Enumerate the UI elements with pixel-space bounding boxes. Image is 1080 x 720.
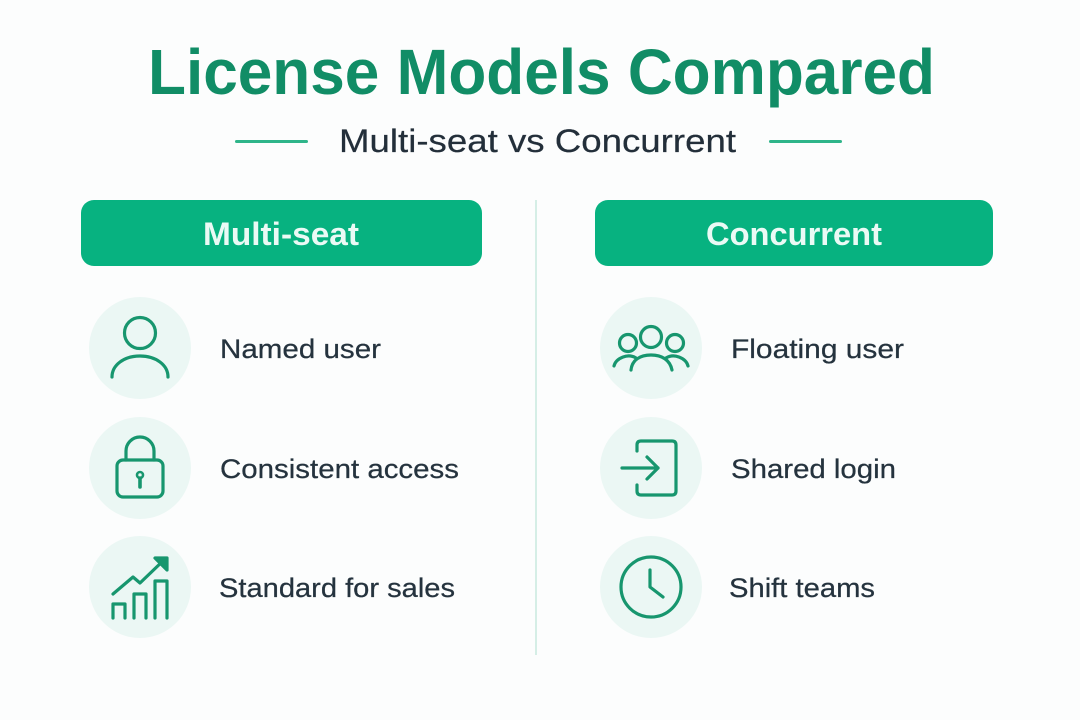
header: multi-seat: [81, 200, 482, 266]
subtitle with rules: [235, 123, 842, 159]
row: floating user: Floating user: [731, 334, 904, 364]
title: License Models Compared: [148, 36, 935, 108]
subtitle with rules: Multi-seat vs Concurrent: [339, 123, 736, 159]
row: shift teams: [600, 536, 875, 638]
center divider: [535, 200, 537, 655]
row: shared login: [600, 417, 896, 519]
header: concurrent: [595, 200, 993, 266]
icon: group of users: [614, 326, 688, 370]
row: shared login: Shared login: [731, 454, 896, 484]
row: named user: Named user: [220, 334, 381, 364]
header: multi-seat: Multi-seat: [203, 216, 359, 252]
row: consistent access: [89, 417, 459, 519]
icon: person: [112, 318, 168, 377]
row: standard for sales: Standard for sales: [219, 573, 455, 603]
row: consistent access: Consistent access: [220, 454, 459, 484]
header: concurrent: Concurrent: [706, 216, 882, 252]
panel: multi-seat: [81, 200, 482, 638]
panel: concurrent: [595, 200, 993, 638]
icon: growth chart: [113, 558, 167, 618]
row: named user: [89, 297, 381, 399]
row: shift teams: Shift teams: [729, 573, 875, 603]
icon: login arrow: [622, 441, 676, 495]
row: standard for sales: [89, 536, 455, 638]
icon: lock: [117, 437, 163, 497]
icon: clock: [621, 557, 681, 617]
row: floating user: [600, 297, 904, 399]
